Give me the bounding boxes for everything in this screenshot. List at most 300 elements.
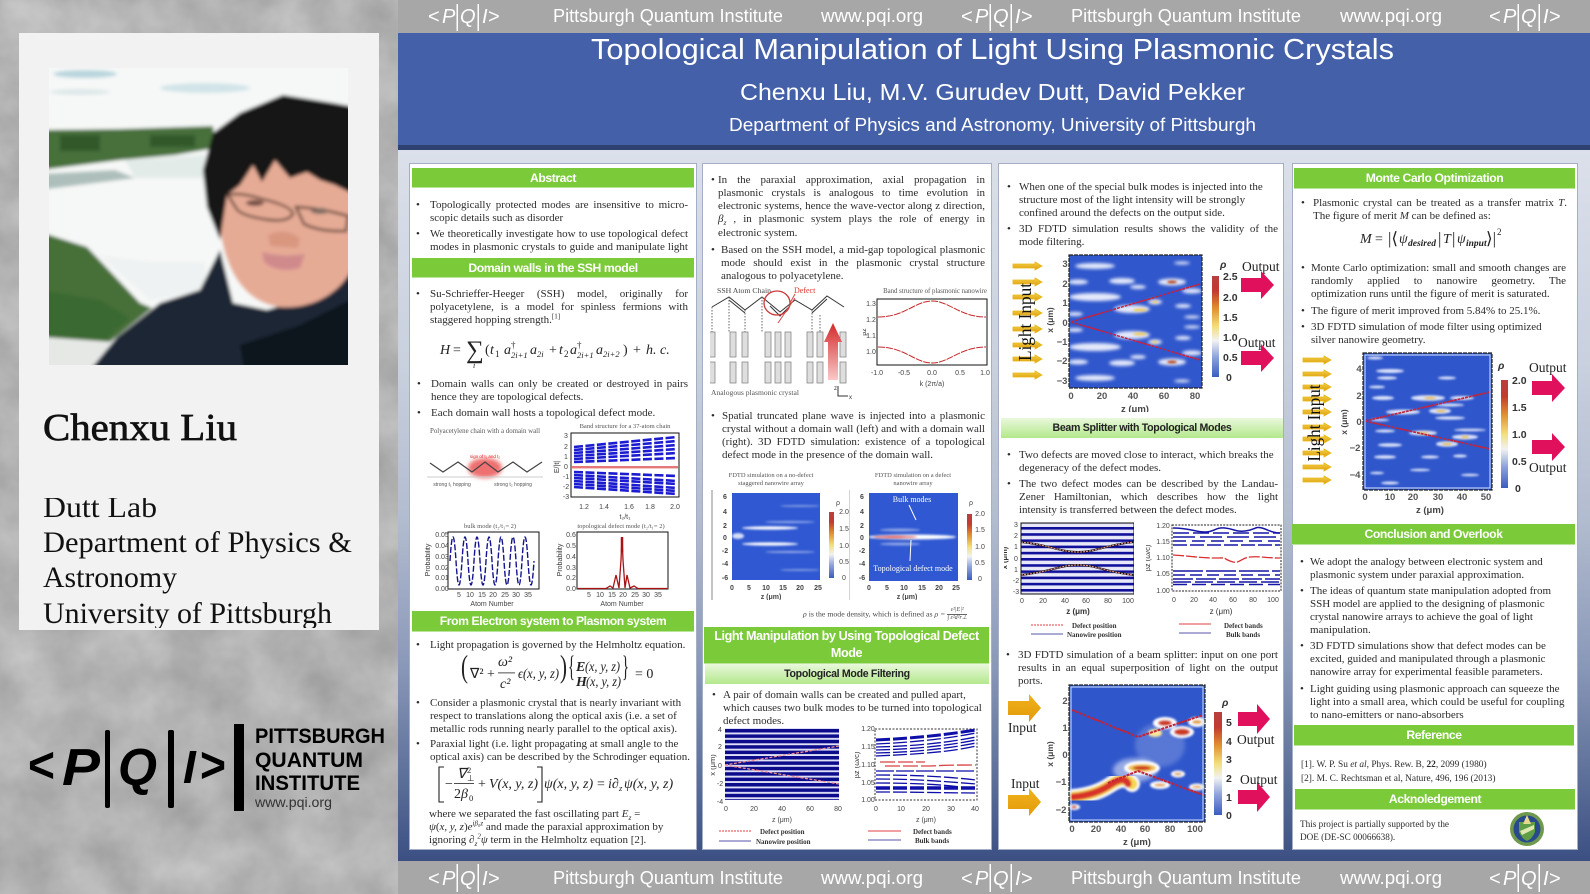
bottom banner bar: P bbox=[1503, 868, 1517, 890]
equation: figure of merit bbox=[1358, 226, 1508, 252]
chart: splitter bands: 1.15 bbox=[1156, 539, 1170, 546]
chart: plasmonic band structure: 0.5 bbox=[955, 370, 965, 377]
figure: beam splitter simulation: Output bbox=[1237, 732, 1275, 747]
heading: domain walls bbox=[412, 258, 694, 278]
equation: figure of merit: ψ bbox=[1399, 232, 1408, 247]
bottom banner bar: I bbox=[1015, 868, 1021, 890]
chart: bulk mode: 0.02 bbox=[435, 565, 449, 572]
chart: splitter bands: 20 bbox=[1190, 597, 1198, 604]
equation: SSH Hamiltonian: 2i+2 bbox=[603, 349, 620, 359]
conclusion bullet 4: light into a small area, which could be useful for coupling bbox=[1310, 696, 1564, 708]
chart: filter bands bbox=[855, 726, 979, 845]
chart: topological defect mode bbox=[556, 523, 668, 608]
bottom banner bar: Pittsburgh Quantum Institute bbox=[553, 868, 783, 888]
chart: topological defect mode: 25 bbox=[631, 592, 639, 599]
transfer matrix text bbox=[1313, 197, 1567, 223]
figure: optimized mode filter: 50 bbox=[1481, 492, 1491, 503]
figure: optimized mode filter: 20 bbox=[1408, 492, 1418, 503]
figure: optimized mode filter: 2 bbox=[1356, 391, 1362, 402]
FDTD validity text bbox=[1007, 223, 1278, 248]
panel: column 1: • bbox=[416, 228, 420, 240]
equation: SSH Hamiltonian: ( bbox=[485, 343, 490, 358]
panel: column 2: • bbox=[712, 689, 716, 701]
figure: beam splitter simulation: 0 bbox=[1226, 810, 1232, 822]
equation: SSH Hamiltonian: a bbox=[596, 343, 603, 358]
equation: SSH Hamiltonian: + bbox=[549, 343, 557, 358]
top banner bar: Pittsburgh Quantum Institute bbox=[1071, 6, 1301, 26]
chart: no-defect FDTD heatmap: 0 bbox=[730, 585, 734, 592]
SSH mid-gap text: mode should exist in the plasmonic crystal structure bbox=[721, 257, 985, 269]
SSH model text: Su-Schrieffer-Heeger (SSH) model, originally for bbox=[430, 288, 688, 300]
equation: figure of merit: |⟨ bbox=[1388, 229, 1398, 248]
equation: SSH Hamiltonian: = bbox=[453, 343, 461, 358]
chart: splitter nanowire geometry: 100 bbox=[1122, 598, 1134, 605]
figure: mode filter simulation: 2.0 bbox=[1223, 292, 1238, 304]
chart: topological defect mode: 0.0 bbox=[566, 586, 576, 593]
chart: bulk mode: 0.04 bbox=[435, 543, 449, 550]
chart: splitter bands: 1.00 bbox=[1156, 588, 1170, 595]
PQI logo: INSTITUTE bbox=[255, 772, 360, 795]
FDTD validity text: mode filtering. bbox=[1019, 236, 1084, 248]
figure: mode filter simulation bbox=[1012, 254, 1280, 412]
conclusion bullet 3 bbox=[1310, 640, 1570, 679]
chart: filter nanowire geometry: 4 bbox=[718, 727, 722, 734]
paraxial text bbox=[416, 738, 690, 763]
heading: conclusion: Conclusion and Overlook bbox=[1365, 527, 1502, 541]
colorbar bbox=[1501, 380, 1508, 488]
figure: beam splitter simulation: 1 bbox=[1226, 792, 1232, 804]
figure: beam splitter simulation: z (μm) bbox=[1123, 837, 1151, 848]
chart: topological defect mode: 20 bbox=[619, 592, 627, 599]
figure: beam splitter simulation: 80 bbox=[1165, 824, 1175, 835]
plasmonic crystal text: Consider a plasmonic crystal that is nearly invariant with bbox=[430, 697, 681, 709]
figure: mode filter simulation: 40 bbox=[1128, 391, 1138, 402]
colorbar bbox=[1214, 712, 1222, 815]
chart: no-defect FDTD heatmap: 2 bbox=[723, 523, 727, 530]
figure: optimized mode filter: 1.0 bbox=[1512, 429, 1527, 441]
chart: no-defect FDTD heatmap: -2 bbox=[722, 548, 728, 555]
chart: band structure 37-atom chain: -2 bbox=[563, 484, 569, 491]
chart: bulk mode: 30 bbox=[512, 592, 520, 599]
chart: bulk mode: 35 bbox=[524, 592, 532, 599]
chart: no-defect FDTD heatmap: -4 bbox=[722, 561, 728, 568]
conclusion bullet 1: We adopt the analogy between electronic system and bbox=[1310, 556, 1543, 568]
panel: column 3: • bbox=[1007, 223, 1011, 235]
panel: column 1: • bbox=[416, 639, 420, 651]
speaker card bbox=[19, 33, 379, 630]
chart: splitter nanowire geometry: 0 bbox=[1020, 598, 1024, 605]
top banner bar: > bbox=[1549, 6, 1561, 28]
chart: defect FDTD heatmap: 2.0 bbox=[975, 511, 985, 518]
beam splitter text: ports. bbox=[1018, 675, 1043, 687]
PQI logo: www.pqi.org bbox=[254, 795, 332, 810]
figure: beam splitter simulation: Input bbox=[1011, 776, 1040, 791]
mode filtering text bbox=[712, 689, 982, 727]
top banner bar: P bbox=[442, 6, 456, 28]
conclusion bullet 2: crystal nanowire arrays to achieve the goal of light bbox=[1310, 611, 1533, 623]
figure: beam splitter simulation: −1 bbox=[1056, 777, 1067, 788]
funding note bbox=[1300, 818, 1490, 844]
icon: light input arrows bbox=[1303, 356, 1331, 484]
figure: mode filter simulation: −1 bbox=[1057, 337, 1068, 348]
chart: bulk mode: 15 bbox=[478, 592, 486, 599]
derivation note: ψ(x, y, z)eiβ₀z and made the paraxial approximation by bbox=[429, 819, 663, 833]
output labels and arrows: Output bbox=[1529, 360, 1567, 375]
chart: filter nanowire geometry: 0 bbox=[724, 806, 728, 813]
beam splitter text: results in an equal superposition of light on the output bbox=[1018, 662, 1278, 674]
bottom banner bar: > bbox=[1549, 868, 1561, 890]
spatial plane wave text: Spatial truncated plane wave is injected into a plasmonic bbox=[722, 410, 985, 422]
domain walls bullet 1: Domain walls can only be created or destroyed in pairs bbox=[431, 378, 688, 390]
chart: splitter nanowire geometry: 1 bbox=[1014, 544, 1018, 551]
chart: topological defect mode: 15 bbox=[608, 592, 616, 599]
chart: splitter bands: 1.20 bbox=[1156, 523, 1170, 530]
equation: SSH Hamiltonian: a bbox=[570, 343, 577, 358]
chart: splitter nanowire geometry: 80 bbox=[1104, 598, 1112, 605]
chart: splitter bands: 1.05 bbox=[1156, 571, 1170, 578]
equation: paraxial Schrodinger: ψ(x, y, z) bbox=[544, 777, 593, 792]
chart: splitter nanowire geometry: 3 bbox=[1014, 522, 1018, 529]
figure: SSH chain and nanowire array: z bbox=[834, 386, 837, 392]
heading: Monte Carlo bbox=[1294, 168, 1575, 189]
chart: splitter nanowire geometry: 0 bbox=[1014, 556, 1018, 563]
colorbar bbox=[1212, 276, 1219, 377]
panel: column 3: • bbox=[1006, 649, 1010, 661]
chart: no-defect FDTD heatmap: 25 bbox=[814, 585, 822, 592]
figure: mode filter simulation: 2 bbox=[1062, 279, 1068, 290]
mode density definition bbox=[802, 606, 967, 621]
equation: SSH Hamiltonian: 2i+1 bbox=[577, 350, 594, 360]
speaker name: Chenxu Liu bbox=[43, 407, 237, 449]
chart: filter nanowire geometry: 2 bbox=[718, 744, 722, 751]
Landau-Zener text: Zener Hamiltonian, which describes how the light bbox=[1019, 491, 1278, 503]
silver nanowire text bbox=[1311, 321, 1566, 347]
abstract bullet 1 bbox=[416, 199, 688, 224]
bottom banner bar: > bbox=[488, 868, 500, 890]
equation: paraxial Schrodinger: 2 bbox=[467, 765, 471, 775]
chart: topological defect mode: 5 bbox=[587, 592, 591, 599]
chart: bulk mode: 0.01 bbox=[435, 575, 449, 582]
icon: input arrows bbox=[1008, 694, 1041, 722]
chart: filter bands: Bulk bands bbox=[915, 837, 949, 845]
paraxial analogy text bbox=[711, 174, 985, 239]
top banner bar: < bbox=[1489, 6, 1501, 28]
figure: polyacetylene chain bbox=[427, 428, 543, 488]
figure: mode filter simulation: x (μm) bbox=[1045, 307, 1055, 333]
mode density definition: ρ is the mode density, which is defined as ρ = bbox=[803, 609, 945, 618]
bottom banner bar: Q bbox=[1521, 868, 1537, 890]
bottom banner bar: > bbox=[1021, 868, 1033, 890]
heading: reference: Reference bbox=[1406, 728, 1462, 742]
figure: mode filter simulation: −2 bbox=[1057, 356, 1067, 367]
spatial plane wave text bbox=[711, 410, 985, 461]
bottom banner bar: www.pqi.org bbox=[1339, 868, 1442, 888]
chart: filter nanowire geometry: 20 bbox=[750, 806, 758, 813]
PQI logo: < bbox=[28, 737, 55, 793]
panel: column 1 bbox=[410, 164, 696, 849]
chart: topological defect mode: 10 bbox=[596, 592, 604, 599]
heading: abstract bbox=[412, 168, 694, 188]
figure: beam splitter simulation: 2 bbox=[1062, 696, 1068, 707]
figure: optimized mode filter: 0 bbox=[1362, 492, 1368, 503]
bottom banner bar: Q bbox=[460, 868, 476, 890]
chart: defect FDTD heatmap: 0 bbox=[867, 585, 871, 592]
chart: defect FDTD heatmap: 0.5 bbox=[975, 560, 985, 567]
bottom banner bar: < bbox=[961, 868, 973, 890]
chart: splitter nanowire geometry: 1 bbox=[1014, 567, 1018, 574]
panel: column 3: • bbox=[1007, 449, 1011, 461]
top banner bar: I bbox=[1015, 6, 1021, 28]
chart: band structure 37-atom chain: E/|t| bbox=[554, 461, 561, 473]
chart: splitter bands bbox=[1146, 520, 1282, 642]
figure: polyacetylene chain: sign of t₁ and t₂ bbox=[470, 454, 500, 459]
heatmap bbox=[1068, 685, 1206, 822]
figure: SSH chain and nanowire array: x bbox=[849, 395, 852, 401]
equation: paraxial Schrodinger: + bbox=[478, 777, 486, 792]
figure: beam splitter simulation: Input bbox=[1008, 720, 1037, 735]
conclusion bullet 3: nanowire array for experimental feasible parameters. bbox=[1310, 666, 1543, 678]
references list: [1]. W. P. Su et al, Phys. Rew. B, 22, 2099 (1980) bbox=[1301, 760, 1487, 770]
panel: column 4: • bbox=[1300, 640, 1304, 652]
equation: figure of merit: ψ bbox=[1457, 232, 1466, 247]
conclusion bullet 3: excited, guided and manipulated through a plasmonic bbox=[1310, 653, 1546, 665]
chart: band structure 37-atom chain: 1.8 bbox=[645, 504, 655, 511]
bottom banner bar: Pittsburgh Quantum Institute bbox=[1071, 868, 1301, 888]
chart: plasmonic band structure: 0.0 bbox=[927, 370, 937, 377]
figure: optimized mode filter: 1.5 bbox=[1512, 402, 1527, 414]
figure: optimized mode filter: 40 bbox=[1457, 492, 1467, 503]
paraxial analogy text: In the paraxial approximation, axial propagation in bbox=[718, 174, 985, 186]
chart: defect FDTD heatmap: FDTD simulation on a defect bbox=[875, 472, 951, 479]
chart: filter bands: 0 bbox=[874, 806, 878, 813]
Landau-Zener text: intensity is transferred between the defect modes. bbox=[1019, 504, 1237, 516]
chart: splitter bands: 60 bbox=[1229, 597, 1237, 604]
department: Department of Physics and Astronomy, University of Pittsburgh bbox=[729, 115, 1256, 135]
panel: column 1: • bbox=[416, 199, 420, 211]
panel: column 4: • bbox=[1300, 585, 1304, 597]
figure: SSH chain and nanowire array bbox=[710, 286, 852, 401]
chart: bulk mode: Probability bbox=[425, 543, 432, 576]
chart: splitter bands: 0 bbox=[1172, 597, 1176, 604]
figure: optimized mode filter: 0.5 bbox=[1512, 456, 1527, 468]
domain walls bullet 1: hence they are topological defects. bbox=[431, 391, 583, 403]
PQI logo: P bbox=[62, 739, 100, 797]
equation: paraxial Schrodinger: V(x, y, z) bbox=[489, 777, 538, 792]
chart: plasmonic band structure: -1.0 bbox=[871, 370, 883, 377]
chart: band structure 37-atom chain bbox=[554, 423, 680, 521]
equation: SSH Hamiltonian: h. c. bbox=[646, 343, 670, 358]
equation: figure of merit: M bbox=[1359, 232, 1373, 247]
chart: filter nanowire geometry: -2 bbox=[717, 781, 723, 788]
mode filtering text: which causes two bulk modes to be turned into topological bbox=[723, 702, 982, 714]
derivation note: where we separated the fast oscillating part Ez = bbox=[429, 808, 640, 822]
panel: column 3: • bbox=[1007, 478, 1011, 490]
SSH model text: polyacetylene, is a model for spinless fermions with bbox=[430, 301, 688, 313]
chart: defect FDTD heatmap: 1.0 bbox=[975, 544, 985, 551]
figure: beam splitter simulation: 5 bbox=[1226, 717, 1232, 729]
figure: beam splitter simulation bbox=[1004, 683, 1279, 848]
equation: figure of merit: desired bbox=[1408, 239, 1436, 249]
chart: defect FDTD heatmap: 20 bbox=[935, 585, 943, 592]
chart: band structure 37-atom chain: Band structure for a 37-atom chain bbox=[580, 423, 671, 430]
equation: figure of merit: 2 bbox=[1497, 227, 1502, 237]
paraxial text: Paraxial light (i.e. light propagating at small angle to the bbox=[430, 738, 678, 750]
chart: defect FDTD heatmap: 6 bbox=[860, 494, 864, 501]
chart: no-defect FDTD heatmap: 1.0 bbox=[839, 543, 849, 550]
bottom banner bar: I bbox=[482, 868, 488, 890]
figure: mode filter simulation: 1.0 bbox=[1223, 332, 1238, 344]
chart: topological defect mode: Atom Number bbox=[600, 601, 644, 608]
chart: defect FDTD heatmap: -2 bbox=[859, 548, 865, 555]
figure: mode filter simulation: 20 bbox=[1097, 391, 1107, 402]
bottom banner bar: < bbox=[428, 868, 440, 890]
chart: no-defect FDTD heatmap: ρ bbox=[836, 500, 840, 507]
references list: [2]. M. C. Rechtsman et al, Nature, 496, 196 (2013) bbox=[1301, 774, 1496, 784]
chart: no-defect FDTD heatmap: 1.5 bbox=[839, 526, 849, 533]
heading: acknowledgement: Acknoledgement bbox=[1389, 792, 1481, 806]
conclusion bullet 2: manipulation. bbox=[1310, 624, 1371, 636]
chart: bulk mode: 10 bbox=[466, 592, 474, 599]
chart: bulk mode: Atom Number bbox=[470, 601, 514, 608]
figure: beam splitter simulation: 20 bbox=[1091, 824, 1101, 835]
chart: splitter bands: z (μm) bbox=[1210, 607, 1233, 616]
top banner bar bbox=[398, 0, 1590, 33]
Helmholtz text: Light propagation is governed by the Helmholtz equation. bbox=[430, 639, 685, 651]
panel: column 1: • bbox=[416, 288, 420, 300]
conclusion bullet 1: plasmonic system under paraxial approximation. bbox=[1310, 569, 1524, 581]
panel: column 3: • bbox=[1007, 181, 1011, 193]
icon: DOE seal bbox=[1509, 811, 1545, 847]
chart: no-defect FDTD heatmap: 4 bbox=[723, 509, 727, 516]
chart: defect FDTD heatmap: -6 bbox=[859, 575, 865, 582]
top banner bar: Q bbox=[993, 6, 1009, 28]
heading: reference bbox=[1294, 725, 1574, 746]
panel: column 2: • bbox=[711, 174, 715, 186]
conclusion bullet 4: Light guiding using plasmonic approach can squeeze the bbox=[1310, 683, 1560, 695]
Landau-Zener text bbox=[1007, 478, 1278, 516]
equation: figure of merit: ⟩| bbox=[1486, 229, 1496, 248]
chart: splitter nanowire geometry: -3 bbox=[1013, 589, 1019, 596]
abstract bullet 1: scopic details such as disorder bbox=[430, 212, 563, 224]
heading: electron to plasmon bbox=[412, 611, 694, 632]
chart: filter nanowire geometry: 0 bbox=[718, 763, 722, 770]
heatmap bbox=[1363, 353, 1492, 490]
equation: Helmholtz: (x, y, z) bbox=[585, 660, 620, 675]
chart: filter bands: 1.00 bbox=[861, 797, 875, 804]
equation: Helmholtz: ω² bbox=[498, 655, 513, 670]
paraxial analogy text: plasmonic crystals is analogous to time evolution in bbox=[718, 187, 985, 199]
beam splitter text: 3D FDTD simulation of a beam splitter: input on one port bbox=[1018, 649, 1278, 661]
chart: band structure 37-atom chain: t₂/t₁ bbox=[620, 514, 631, 521]
chart: no-defect FDTD heatmap: 0 bbox=[842, 575, 846, 582]
figure: mode filter simulation: 2.5 bbox=[1223, 271, 1238, 283]
chart: band structure 37-atom chain: 1.6 bbox=[624, 504, 634, 511]
chart: filter bands: 20 bbox=[922, 806, 930, 813]
paraxial analogy text: electronic system. bbox=[718, 227, 797, 239]
chart: band structure 37-atom chain: 1 bbox=[564, 454, 568, 461]
heading: abstract: Abstract bbox=[530, 171, 576, 185]
chart: splitter nanowire geometry: 20 bbox=[1039, 598, 1047, 605]
chart: filter bands: 40 bbox=[971, 806, 979, 813]
equation: SSH Hamiltonian bbox=[439, 337, 670, 370]
chart: splitter nanowire geometry: Nanowire position bbox=[1067, 631, 1122, 639]
mode injection text bbox=[1007, 181, 1263, 219]
chart: plasmonic band structure: 1.0 bbox=[980, 370, 990, 377]
figure: mode filter simulation: 1 bbox=[1062, 298, 1068, 309]
equation: SSH Hamiltonian: H bbox=[439, 343, 451, 358]
equation: figure of merit: | bbox=[1438, 229, 1441, 248]
icon: red propagation arrow bbox=[824, 323, 842, 380]
chart: defect FDTD heatmap: 2 bbox=[860, 523, 864, 530]
derivation note: ignoring ∂z2ψ term in the Helmholtz equation [2]. bbox=[429, 832, 646, 848]
funding note: This project is partially supported by the bbox=[1300, 819, 1449, 829]
figure: optimized mode filter: 0 bbox=[1515, 483, 1521, 495]
equation: SSH Hamiltonian: i bbox=[473, 361, 475, 370]
figure: optimized mode filter bbox=[1295, 350, 1575, 518]
figure: mode filter simulation: Output bbox=[1238, 335, 1276, 350]
heading: Monte Carlo: Monte Carlo Optimization bbox=[1366, 171, 1503, 185]
conclusion bullet 1 bbox=[1310, 556, 1570, 582]
chart: splitter bands: 80 bbox=[1249, 597, 1257, 604]
chart: bulk mode: 5 bbox=[457, 592, 461, 599]
heading: light manipulation: Light Manipulation by Using Topological Defect Mode bbox=[714, 629, 979, 660]
affiliation text: Department of Physics & bbox=[43, 526, 352, 559]
figure: beam splitter simulation: 1 bbox=[1062, 723, 1068, 734]
chart: defect FDTD heatmap: nanowire array bbox=[893, 480, 933, 487]
figure: optimized mode filter: 0 bbox=[1356, 417, 1362, 428]
chart: filter bands: 1.10 bbox=[861, 762, 875, 769]
icon: light input arrows bbox=[1013, 262, 1042, 379]
panel: column 1: • bbox=[417, 407, 421, 419]
equation: paraxial Schrodinger: i∂ bbox=[608, 777, 619, 792]
equation: paraxial Schrodinger: ψ(x, y, z) bbox=[624, 777, 673, 792]
chart: splitter nanowire geometry: 2 bbox=[1014, 533, 1018, 540]
chart: filter bands: 10 bbox=[897, 806, 905, 813]
heatmap bbox=[1069, 255, 1202, 388]
figure: optimized mode filter: Light Input bbox=[1304, 384, 1324, 462]
figure: SSH chain and nanowire array: Analogous plasmonic crystal bbox=[711, 388, 799, 397]
PQI logo: QUANTUM bbox=[255, 749, 363, 772]
equation: SSH Hamiltonian: t bbox=[490, 343, 495, 358]
figure: mode filter simulation: 3 bbox=[1062, 259, 1068, 270]
FDTD validity text: 3D FDTD simulation results shows the validity of the bbox=[1019, 223, 1278, 235]
equation: SSH Hamiltonian: + bbox=[633, 343, 641, 358]
chart: defect FDTD heatmap: 15 bbox=[918, 585, 926, 592]
top banner bar: P bbox=[975, 6, 989, 28]
transfer matrix text: The figure of merit M can be defined as: bbox=[1313, 210, 1491, 222]
chart: band structure 37-atom chain: 2.0 bbox=[670, 504, 680, 511]
output labels and arrows bbox=[1238, 704, 1270, 734]
mode injection text: When one of the special bulk modes is injected into the bbox=[1019, 181, 1263, 193]
chart: filter nanowire geometry: -4 bbox=[717, 799, 723, 806]
figure: mode filter simulation: 80 bbox=[1190, 391, 1200, 402]
panel: column 4: • bbox=[1300, 556, 1304, 568]
equation: SSH Hamiltonian: ∑ bbox=[466, 337, 484, 364]
output labels and arrows: Output bbox=[1242, 259, 1280, 274]
top banner bar: > bbox=[488, 6, 500, 28]
figure: optimized mode filter: −4 bbox=[1350, 470, 1361, 481]
top banner bar: < bbox=[428, 6, 440, 28]
chart: defect FDTD heatmap: -4 bbox=[859, 561, 865, 568]
PQI logo: I bbox=[183, 741, 197, 793]
figure: beam splitter simulation: 2 bbox=[1226, 773, 1232, 785]
Monte Carlo text: randomly applied to nanowire geometry. The bbox=[1311, 275, 1566, 287]
bottom banner bar bbox=[398, 861, 1590, 894]
equation: Helmholtz: (x, y, z) bbox=[586, 675, 621, 690]
chart: band structure 37-atom chain: -3 bbox=[563, 494, 569, 501]
chart: plasmonic band structure: 1.1 bbox=[866, 333, 876, 340]
heading: acknowledgement bbox=[1295, 789, 1575, 810]
